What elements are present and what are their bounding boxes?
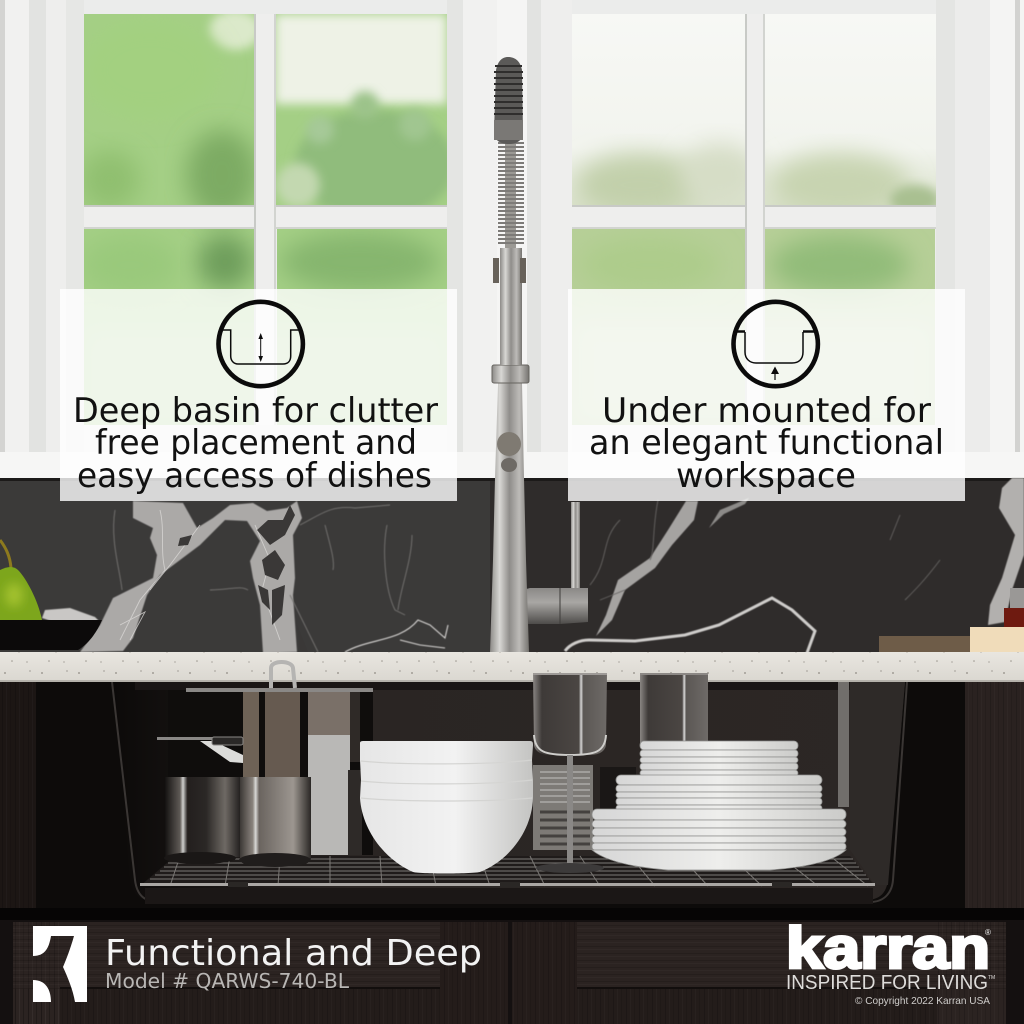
marble vein: texture lines [120, 510, 280, 640]
faucet spring [498, 140, 524, 248]
faucet tube [500, 248, 522, 365]
text: under mounted caption [589, 391, 944, 496]
window sill [0, 452, 1024, 478]
faucet collar [492, 365, 529, 383]
icon: brand K mark [33, 926, 87, 1002]
cabinet sides [0, 682, 1024, 1024]
text: deep basin caption: free placement and [95, 423, 417, 463]
marble vein: small right [709, 498, 749, 528]
faucet knob [497, 432, 521, 472]
right door [512, 922, 1006, 1024]
text: model number: Model # QARWS-740-BL [105, 969, 350, 993]
sink back wall [112, 682, 905, 900]
text: deep basin caption [73, 391, 438, 496]
tumbler glasses [164, 770, 362, 867]
faucet [490, 57, 588, 652]
small plates [640, 741, 798, 776]
marble vein: right edge [988, 478, 1024, 625]
marble vein: diagonal right [596, 501, 698, 636]
logo: karran: karran [786, 916, 990, 981]
countertop [0, 652, 1024, 682]
marble backsplash [0, 478, 1024, 653]
medium plates [616, 775, 822, 811]
sink rack [140, 856, 875, 887]
water glass [640, 673, 708, 743]
text: under mounted caption: Under mounted for [602, 391, 931, 431]
title: functional and deep: Functional and Deep [105, 933, 482, 974]
right window view: trees [572, 14, 940, 425]
window frame [0, 0, 1024, 452]
stockpot with lid [168, 662, 373, 855]
sink top back band [135, 682, 850, 690]
marble vein: bright thin left [345, 620, 448, 652]
sink right wall [850, 682, 905, 885]
marble vein: wavy ribbon right [565, 598, 815, 653]
panel: under mounted [568, 289, 965, 501]
plate stacks [592, 741, 846, 870]
icon: under mount [734, 302, 818, 386]
text: deep basin caption: Deep basin for clutter [73, 391, 438, 431]
logo: karran [786, 916, 995, 1007]
can behind glass [533, 765, 636, 850]
faucet arm [515, 588, 588, 624]
white bowls stack [360, 741, 533, 874]
sink left wall highlight [112, 682, 907, 902]
marble vein: thin left [114, 505, 412, 652]
faucet rear rod [571, 502, 580, 590]
faucet body [490, 383, 529, 652]
logo: karran: ® [985, 928, 991, 937]
panel: deep basin [60, 289, 457, 501]
pear and bowl [0, 540, 102, 650]
logo: karran: INSPIRED FOR LIVING [786, 972, 988, 994]
sink and cabinet under counter [0, 682, 1024, 1024]
cabinet doors [0, 908, 1024, 1024]
faucet clips [493, 258, 526, 283]
marble vein: left large [42, 501, 302, 653]
text: under mounted caption: workspace [676, 456, 856, 496]
faucet spray head [494, 57, 523, 144]
sink bottom lip [145, 888, 873, 904]
pan with handle [157, 737, 243, 763]
left window view: trees [80, 10, 455, 425]
marble vein: thin right [590, 500, 940, 600]
logo: karran: TM [988, 975, 995, 981]
text: deep basin caption: easy access of dishes [77, 456, 432, 496]
icon: deep basin [219, 302, 303, 386]
text: under mounted caption: an elegant functional [589, 423, 944, 463]
sink right pipe [838, 682, 849, 807]
left door [13, 922, 508, 1024]
wine glass [533, 673, 607, 873]
window muntins [84, 14, 936, 425]
wooden boards and bottle on counter [879, 588, 1024, 652]
large plates [592, 809, 846, 870]
logo: karran: © Copyright 2022 Karran USA [855, 995, 990, 1007]
stockpot handle [271, 662, 295, 688]
marble vein: dark inclusions [178, 505, 308, 652]
